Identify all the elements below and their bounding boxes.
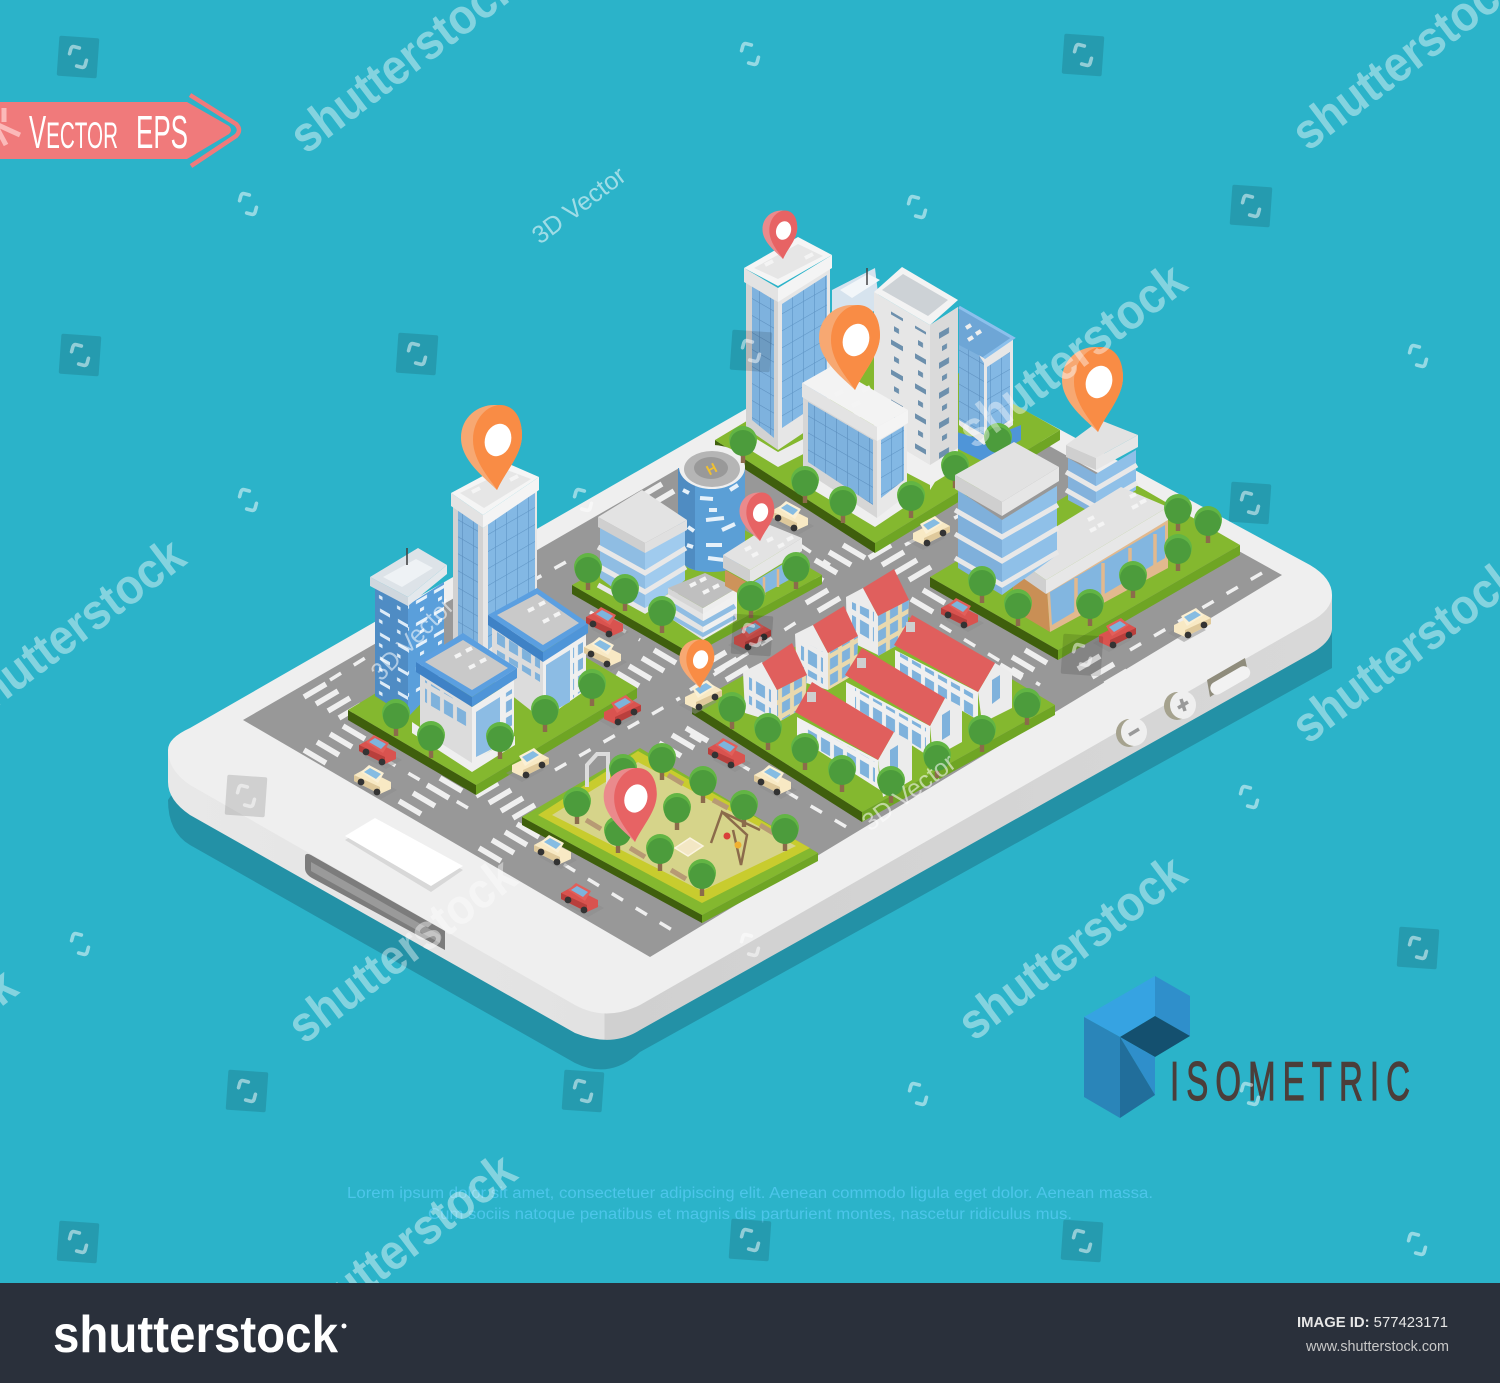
long orange and glass building — [1010, 487, 1168, 632]
home button — [345, 818, 463, 892]
long house, back — [894, 615, 1012, 723]
green block: right — [930, 470, 1240, 660]
phone side wall — [168, 595, 1332, 1040]
park trees — [609, 754, 637, 791]
minus button — [1116, 718, 1147, 747]
image id: IMAGE ID: 577423171 — [1297, 1314, 1448, 1331]
vector eps banner — [0, 95, 239, 166]
watermark wordmarks: shutterstock — [277, 846, 526, 1054]
back houses row — [743, 569, 909, 723]
crosswalks — [304, 484, 1127, 861]
cars on the roads — [354, 501, 1211, 917]
lorem ipsum caption — [347, 1185, 1153, 1223]
small flat office — [668, 573, 737, 640]
park ground — [552, 762, 796, 891]
phone drop shadow — [168, 448, 1332, 1069]
road markings — [304, 484, 1262, 930]
house: near gable — [743, 643, 807, 723]
speaker slot — [305, 854, 445, 950]
sandbox — [675, 838, 703, 856]
striped back tower, right block — [1066, 420, 1138, 515]
watermark wordmarks: shutterstock — [947, 843, 1196, 1051]
lorem ipsum caption: Lorem ipsum dolor sit amet, consectetuer adipiscing elit. Aenean commodo ligula eget dolor. Aenean massa. — [347, 1185, 1153, 1202]
green block: houses — [692, 600, 1055, 822]
lorem ipsum caption: Cum sociis natoque penatibus et magnis dis parturient montes, nascetur ridiculus mus. — [428, 1206, 1072, 1223]
volume slider — [1207, 658, 1253, 697]
isometric logo — [1084, 976, 1410, 1118]
lane dashes — [330, 515, 1262, 930]
green block: upper — [715, 335, 1060, 553]
helipad cylinder tower: H — [703, 459, 720, 478]
smartphone body — [168, 332, 1332, 1040]
helipad cylinder tower — [678, 445, 745, 572]
location pins — [461, 211, 1123, 842]
house: middle gable — [795, 606, 858, 690]
trees: houses block — [718, 688, 1041, 803]
footer wordmark: shutterstock — [53, 1306, 338, 1364]
phone top face — [168, 332, 1332, 1014]
park fence — [538, 751, 810, 903]
watermark wordmarks: shutterstock — [277, 1141, 526, 1349]
striped front tower, right block — [955, 442, 1059, 595]
long house, middle — [845, 648, 962, 758]
phone screen — [243, 352, 1282, 957]
vector eps banner: VECTOR — [29, 106, 118, 158]
house: far gable — [846, 569, 909, 656]
green block: left — [348, 612, 637, 795]
isometric logo: ISOMETRIC — [1170, 1050, 1410, 1112]
blue roof office, front — [412, 633, 517, 772]
small back tower — [832, 268, 880, 320]
park base — [522, 817, 702, 923]
tower with blue roof — [950, 307, 1021, 462]
big glass office — [802, 366, 908, 527]
benches — [586, 775, 775, 879]
footer bar — [0, 1283, 1500, 1383]
watermark wordmarks: 3D Vector — [365, 592, 459, 686]
green block: middle — [572, 510, 822, 659]
playground park — [522, 743, 818, 923]
long house, front — [795, 682, 912, 797]
trees: left block — [382, 669, 606, 759]
striped mid-rise — [598, 490, 687, 612]
watermark wordmarks: shutterstock — [947, 251, 1196, 459]
trees: middle and upper blocks — [574, 423, 1012, 633]
swing set — [711, 812, 760, 865]
tall glass tower — [742, 237, 860, 467]
plus button — [1164, 691, 1196, 720]
blue office tower — [370, 548, 447, 717]
watermark wordmarks: 3D Vector — [527, 161, 631, 250]
orange and glass low office — [723, 525, 802, 600]
left glass tower — [451, 463, 539, 670]
trees: right block — [968, 494, 1222, 626]
blue roof office, back — [488, 588, 588, 720]
white high-rise — [874, 267, 958, 490]
vector eps banner: EPS — [136, 106, 188, 158]
park gate — [587, 754, 608, 787]
website: www.shutterstock.com — [1305, 1339, 1449, 1355]
watermark wordmarks: 3D Vector — [857, 748, 961, 837]
